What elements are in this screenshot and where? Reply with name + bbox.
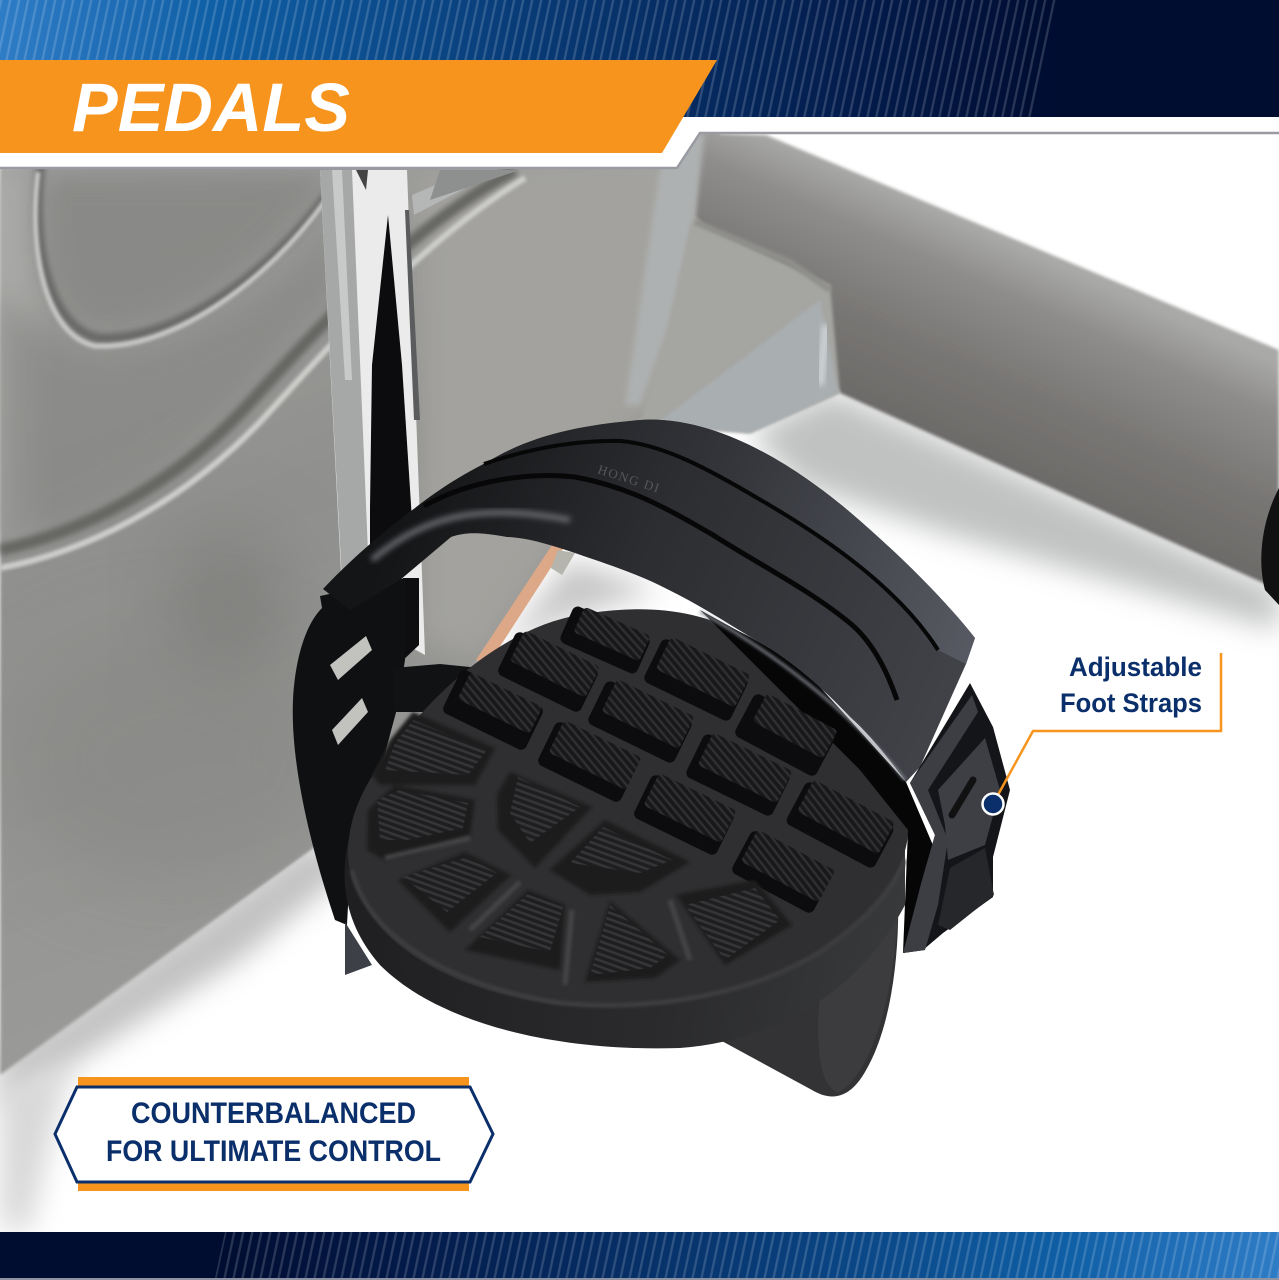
platform lip highlight xyxy=(352,860,905,1005)
callout text: Adjustable xyxy=(1069,652,1202,682)
light left column xyxy=(0,174,30,536)
tread block tops xyxy=(457,607,895,903)
deep shadow under strap xyxy=(700,610,935,953)
warm lit area right of arm xyxy=(418,170,662,652)
grey housing panel xyxy=(0,133,720,1075)
oval inner shading xyxy=(39,172,330,332)
embossed strap lettering: HONG DI xyxy=(596,462,663,496)
badge text: FOR ULTIMATE CONTROL xyxy=(106,1135,441,1168)
pedal rim xyxy=(345,800,905,1048)
tread block shadows xyxy=(441,605,895,915)
orange bottom bar xyxy=(78,1183,469,1191)
callout text: Foot Straps xyxy=(1060,688,1202,718)
callout: adjustable foot straps xyxy=(982,652,1221,814)
arm bright base xyxy=(320,170,425,655)
pedal rear stem xyxy=(720,890,898,1096)
dark blob xyxy=(172,544,286,654)
copper cable and fitting xyxy=(476,545,575,665)
pedal xyxy=(293,420,1010,1096)
top header band xyxy=(0,0,1279,117)
buckle clip xyxy=(938,848,994,930)
curved block tops xyxy=(377,720,780,975)
panel shading group xyxy=(0,169,661,887)
buckle slot xyxy=(952,780,973,815)
strip between curves xyxy=(0,246,326,542)
strap lower groove xyxy=(424,476,897,700)
tube end xyxy=(1261,488,1279,605)
long curve light xyxy=(0,178,525,568)
strap outer rim band xyxy=(484,420,975,664)
axle xyxy=(393,664,480,712)
plate slot upper xyxy=(330,636,372,680)
platform surface xyxy=(348,609,909,1007)
bottom footer band xyxy=(0,1232,1279,1280)
right buckle outer xyxy=(903,683,1010,953)
left lower tab xyxy=(345,922,372,975)
surface ridges xyxy=(385,838,690,985)
floor shadow lower left xyxy=(0,840,360,1110)
top dark spot xyxy=(356,170,368,190)
title banner xyxy=(0,60,717,153)
badge text: COUNTERBALANCED xyxy=(131,1097,416,1130)
pale strip xyxy=(332,170,352,380)
stem inner face xyxy=(818,905,898,1093)
title: PEDALS xyxy=(72,69,350,146)
strap inner lip highlight xyxy=(700,612,905,780)
hexagon xyxy=(55,1087,493,1182)
orange top bar xyxy=(78,1077,469,1086)
bracket lower facet xyxy=(655,300,838,433)
floor shadow in strap window xyxy=(500,560,660,650)
weld highlight xyxy=(820,325,826,385)
leader dot xyxy=(982,794,1004,814)
lower black piece xyxy=(398,578,419,665)
floor fade at bottom left xyxy=(0,1060,70,1230)
silver left xyxy=(320,170,370,600)
black wedge xyxy=(370,215,412,545)
floor shadow under tube xyxy=(750,391,1279,630)
buckle band xyxy=(903,695,978,953)
right dark stripe xyxy=(405,210,420,420)
chrome bracket behind arm xyxy=(412,170,520,215)
badge: counterbalanced xyxy=(55,1077,493,1191)
weld bead xyxy=(695,222,830,290)
strap upper groove xyxy=(484,441,938,650)
left back plate xyxy=(293,578,405,925)
strap xyxy=(323,420,975,782)
chrome pedal arm xyxy=(320,170,425,665)
oval curve dark xyxy=(38,164,329,338)
plate slot lower xyxy=(332,698,368,745)
tube frame and bracket xyxy=(625,133,1279,605)
long curve dark xyxy=(0,170,515,550)
lower panel tone xyxy=(0,691,313,887)
oval curve light xyxy=(35,172,326,346)
leader line xyxy=(993,653,1221,804)
white ribbon under header xyxy=(0,117,1279,168)
bracket xyxy=(640,220,840,433)
tube xyxy=(695,133,1279,590)
strap highlight xyxy=(372,513,570,560)
buckle face xyxy=(938,738,1000,860)
curved block recesses xyxy=(367,712,792,982)
light side wall xyxy=(625,133,705,405)
